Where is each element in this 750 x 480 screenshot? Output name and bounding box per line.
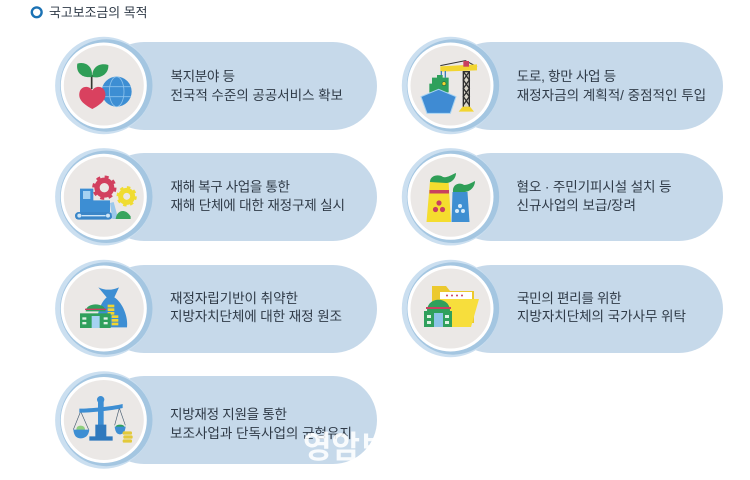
text: fiscal aid: 재정자립기반이 취약한 <box>170 291 298 306</box>
text: welfare: 전국적 수준의 공공서비스 확보 <box>170 88 343 103</box>
icon: ship and crane <box>421 61 477 113</box>
heading: 국고보조금의 목적 <box>49 5 147 20</box>
icon: heart sprout and globe <box>77 63 132 109</box>
text: roads and ports: 도로, 항만 사업 등 <box>517 69 616 84</box>
panel: new business <box>402 148 723 246</box>
text: fiscal aid: 지방자치단체에 대한 재정 원조 <box>170 309 342 324</box>
text: fiscal balance: 보조사업과 단독사업의 균형유지 <box>170 426 352 441</box>
panel: roads and ports <box>402 37 723 134</box>
icon: folder and building <box>424 286 479 327</box>
icon: bulldozer and gears <box>75 177 135 220</box>
panel: fiscal balance <box>55 371 377 469</box>
watermark: 영암보 <box>303 430 389 465</box>
panel: welfare <box>55 37 377 134</box>
icon: money bag and building <box>80 287 127 328</box>
text: disaster recovery: 재해 단체에 대한 재정구제 실시 <box>170 198 345 213</box>
panel: disaster recovery <box>55 148 377 246</box>
text: delegated affairs: 지방자치단체의 국가사무 위탁 <box>517 309 686 324</box>
icon: balance scale <box>73 396 133 443</box>
text: welfare: 복지분야 등 <box>170 69 235 84</box>
text: new business: 신규사업의 보급/장려 <box>516 198 636 213</box>
panel: fiscal aid <box>55 260 377 357</box>
text: roads and ports: 재정자금의 계획적/ 중점적인 투입 <box>517 88 706 103</box>
text: delegated affairs: 국민의 편리를 위한 <box>517 291 622 306</box>
text: fiscal balance: 지방재정 지원을 통한 <box>170 407 287 422</box>
icon: cooling towers <box>426 173 475 222</box>
panel: delegated affairs <box>402 260 723 357</box>
text: disaster recovery: 재해 복구 사업을 통한 <box>170 180 290 194</box>
text: new business: 혐오 · 주민기피시설 설치 등 <box>516 180 672 194</box>
